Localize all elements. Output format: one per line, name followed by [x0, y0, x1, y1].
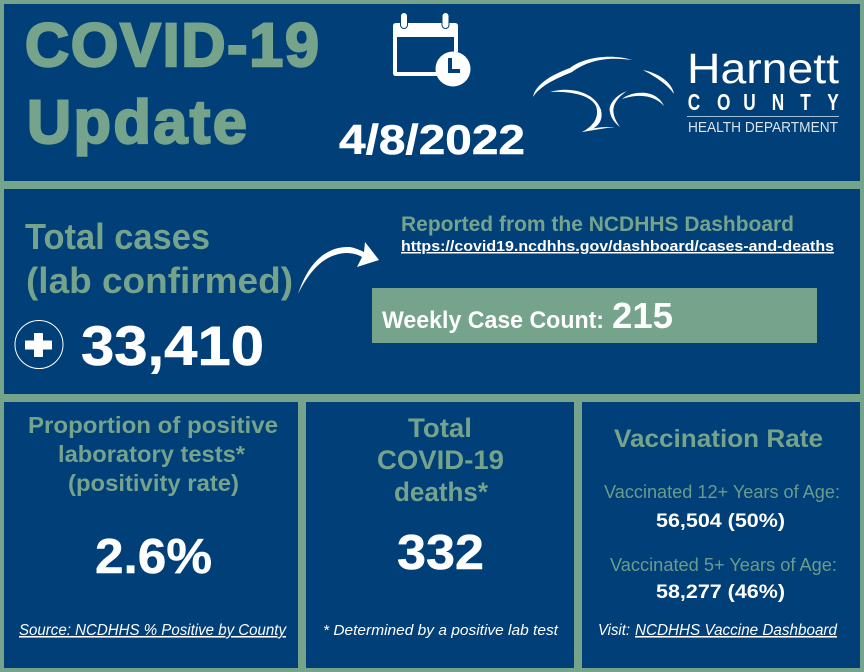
stat: 12+ vaccinated: 56,504 (50%): [656, 511, 785, 532]
heading: positivity: [28, 412, 278, 496]
stat: 5+ vaccinated: Vaccinated 5+ Years of Age:: [610, 555, 837, 575]
heading: deaths: COVID-19: [377, 445, 504, 475]
heading: positivity: Proportion of positive: [28, 412, 278, 438]
heading: total cases: (lab confirmed): [26, 260, 293, 301]
panel: vaccination rate: [582, 402, 860, 668]
callout: weekly case count: 215: [612, 295, 673, 336]
panel: total deaths: [306, 402, 574, 668]
icon: plus in circle: [15, 320, 63, 368]
title: [25, 11, 321, 156]
deaths value: 332: [397, 526, 484, 580]
text: dashboard source: https://covid19.ncdhhs.gov/dashboard/cases-and-deaths: [401, 238, 834, 255]
panel: header: [4, 4, 860, 181]
heading: deaths: deaths*: [394, 477, 488, 507]
logo: Harnett County Health Department: HEALTH DEPARTMENT: [688, 119, 838, 136]
heading: positivity: laboratory tests*: [58, 441, 245, 467]
title: COVID-19: [25, 11, 321, 79]
heading: deaths: [377, 413, 504, 507]
stat: 12+ vaccinated: Vaccinated 12+ Years of Age:: [604, 482, 840, 502]
total case number: 33,410: [81, 314, 264, 377]
stat: 5+ vaccinated: 58,277 (46%): [656, 582, 785, 603]
positivity value: 2.6%: [95, 530, 212, 584]
heading: deaths: Total: [408, 413, 472, 443]
heading: vaccination: Vaccination Rate: [614, 425, 823, 453]
arrow: [298, 242, 379, 294]
text: dashboard source: Reported from the NCDHHS Dashboard: [401, 213, 794, 236]
panel: positivity rate: [4, 402, 298, 668]
date: 4/8/2022: [339, 116, 525, 163]
callout: weekly case count: Weekly Case Count:: [382, 307, 604, 334]
logo: Harnett County Health Department: Harnett: [687, 45, 839, 93]
icon: calendar with clock: [393, 12, 470, 86]
footnote: * Determined by a positive lab test: [323, 622, 559, 639]
panel: total cases: [4, 189, 860, 394]
stat: 5+ vaccinated: [610, 555, 837, 603]
logo: Harnett County Health Department: [533, 45, 839, 136]
title: Update: [27, 88, 249, 156]
vaccine dashboard link: NCDHHS Vaccine Dashboard: [635, 622, 838, 639]
logo tree mark: [533, 57, 674, 132]
heading: positivity: (positivity rate): [68, 470, 239, 496]
stat: 12+ vaccinated: [604, 482, 840, 532]
callout: weekly case count: [372, 288, 817, 343]
heading: total cases: [25, 216, 293, 301]
source link: Source: NCDHHS % Positive by County: [19, 622, 287, 639]
text: dashboard source: [401, 213, 834, 255]
logo: Harnett County Health Department: COUNTY: [688, 91, 839, 116]
vaccine dashboard link: Visit:: [598, 622, 630, 639]
heading: total cases: Total cases: [25, 216, 210, 257]
